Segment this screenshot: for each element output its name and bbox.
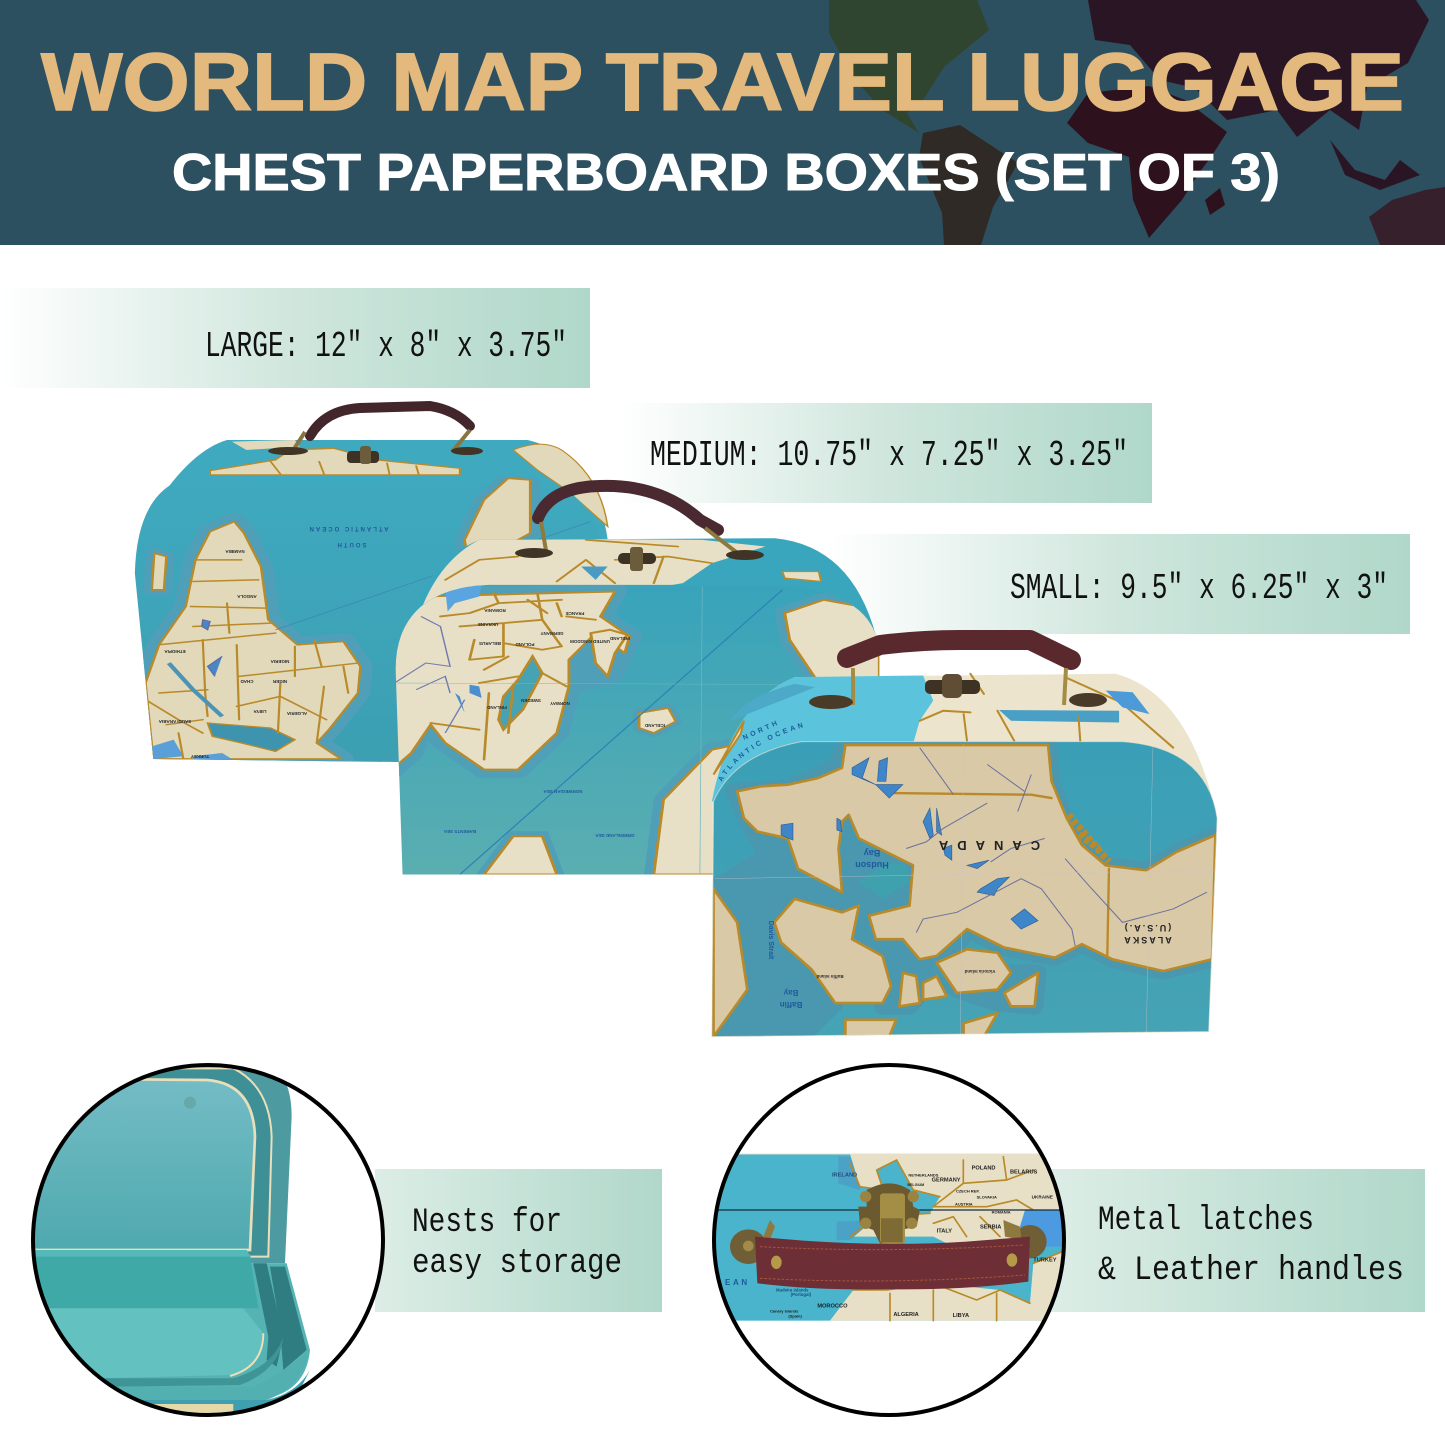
closeup country names: TURKEY [1033, 1257, 1057, 1263]
medium suitcase body [387, 538, 879, 875]
feature band: latches and handles: & Leather handles [1098, 1252, 1404, 1290]
closeup country names: BELGIUM [907, 1183, 924, 1187]
closeup country names: SERBIA [980, 1224, 1001, 1230]
small suitcase latch [925, 674, 980, 698]
closeup country names: ITALY [937, 1228, 952, 1234]
medium suitcase latch [618, 547, 656, 571]
closeup country names: LIBYA [953, 1313, 969, 1319]
large suitcase map labels: NAMIBIA [225, 549, 245, 554]
medium suitcase map labels: ICELAND [644, 723, 665, 728]
closeup country names: Canary Islands [770, 1309, 799, 1314]
closeup country names: ROMANIA [992, 1209, 1011, 1214]
closeup leather handle [755, 1237, 1030, 1290]
size band: small [830, 534, 1410, 634]
medium suitcase map labels [443, 608, 665, 838]
closeup country names: NETHERLANDS [908, 1173, 939, 1178]
feature band: latches and handles: Metal latches [1098, 1202, 1314, 1240]
medium suitcase map labels: BARENTS SEA [443, 829, 476, 834]
medium suitcase map labels: GERMANY [540, 631, 564, 636]
closeup country names: EAN [725, 1278, 750, 1287]
large suitcase map labels: ETHIOPIA [164, 649, 186, 654]
circle: nested boxes interior [20, 1065, 383, 1417]
closeup hinge plates [730, 1220, 1047, 1264]
closeup country names: (Portugal) [791, 1292, 812, 1297]
closeup country names [725, 1165, 1057, 1319]
large suitcase map labels: TURKEY [191, 754, 209, 759]
large suitcase map labels: NIGERIA [270, 659, 289, 664]
size band: large [0, 288, 590, 388]
closeup country names: IRELAND [832, 1173, 857, 1179]
circle: latch and handle closeup [713, 1065, 1067, 1415]
closeup country names: (Spain) [788, 1313, 802, 1318]
medium suitcase [387, 486, 879, 875]
small suitcase map labels: Victoria Island [964, 969, 995, 974]
small suitcase map labels: Bay [864, 848, 880, 858]
closeup brass latch [858, 1183, 920, 1243]
medium suitcase map labels: BELARUS [479, 641, 501, 646]
small suitcase handle [809, 640, 1107, 709]
large suitcase [135, 406, 608, 765]
feature band: nests: easy storage [412, 1245, 622, 1283]
medium suitcase map labels: FRANCE [566, 611, 584, 616]
large suitcase map labels: SOUTH [336, 541, 366, 547]
small suitcase map labels: Hudson [855, 860, 889, 870]
medium suitcase handle [515, 486, 764, 560]
medium suitcase map labels: SWEDEN [521, 698, 541, 703]
large suitcase map labels: ALGERIA [286, 711, 307, 716]
medium suitcase map labels: UNITED KINGDOM [570, 639, 610, 644]
small suitcase map labels: NORTH [742, 720, 778, 740]
medium suitcase map labels: FINLAND [486, 705, 507, 710]
large suitcase map labels: LIBYA [253, 709, 267, 714]
closeup country names: ALGERIA [893, 1312, 919, 1318]
small suitcase map labels: Baffin [780, 1000, 802, 1009]
medium suitcase map labels: UKRAINE [478, 622, 498, 627]
feature band: nests [375, 1169, 662, 1312]
closeup suitcase map [713, 1154, 1067, 1321]
small suitcase map labels: Baffin Island [816, 974, 844, 979]
medium suitcase map labels: IRELAND [609, 636, 630, 641]
large suitcase body [135, 440, 608, 765]
subtitle: CHEST PAPERBOARD BOXES (SET OF 3) [172, 144, 1280, 202]
medium suitcase map labels: NORWEGIAN SEA [543, 789, 582, 794]
world map silhouette [829, 0, 1445, 245]
small suitcase map labels: CANADA [930, 838, 1040, 853]
size band: medium: MEDIUM: 10.75" x 7.25" x 3.25" [650, 435, 1128, 476]
closeup country names: SLOVAKIA [977, 1195, 997, 1200]
large suitcase latch [347, 446, 379, 464]
feature band: latches and handles [1050, 1169, 1425, 1312]
closeup country names: CZECH REP. [956, 1189, 980, 1194]
large suitcase map labels: ATLANTIC OCEAN [308, 525, 388, 531]
large suitcase map labels: CHAD [240, 679, 254, 684]
small suitcase map labels: ALASKA [1122, 935, 1172, 945]
small suitcase map labels: (U.S.A.) [1123, 923, 1171, 933]
medium suitcase map labels: ROMANIA [484, 608, 506, 613]
size band: medium [620, 403, 1152, 503]
small suitcase map labels: Bay [783, 988, 798, 997]
large suitcase map labels [158, 525, 388, 759]
small suitcase [711, 630, 1218, 1037]
closeup country names: Madeira Islands [776, 1288, 809, 1293]
title: WORLD MAP TRAVEL LUGGAGE [41, 37, 1404, 128]
small suitcase map labels [718, 720, 1172, 1009]
closeup country names: UKRAINE [1032, 1195, 1053, 1200]
large suitcase map labels: NIGER [272, 679, 287, 684]
large suitcase map labels: ANGOLA [237, 594, 257, 599]
size band: large: LARGE: 12" x 8" x 3.75" [205, 326, 567, 367]
header banner [0, 0, 1445, 245]
feature band: nests: Nests for [412, 1204, 562, 1242]
closeup country names: AUSTRIA [955, 1201, 973, 1206]
closeup country names: MOROCCO [817, 1303, 848, 1309]
large suitcase handle [268, 406, 483, 455]
closeup country names: BELARUS [1010, 1169, 1038, 1175]
closeup country names: GERMANY [932, 1178, 961, 1184]
closeup country names: POLAND [972, 1165, 996, 1171]
medium suitcase map labels: GREENLAND SEA [595, 833, 635, 838]
small suitcase map labels: ATLANTIC OCEAN [718, 722, 803, 782]
small suitcase map labels: Davis Strait [767, 921, 774, 960]
large suitcase map labels: SAUDI ARABIA [158, 719, 191, 724]
medium suitcase map labels: POLAND [515, 642, 534, 647]
small suitcase body [712, 674, 1217, 1037]
medium suitcase map labels: NORWAY [550, 701, 570, 706]
